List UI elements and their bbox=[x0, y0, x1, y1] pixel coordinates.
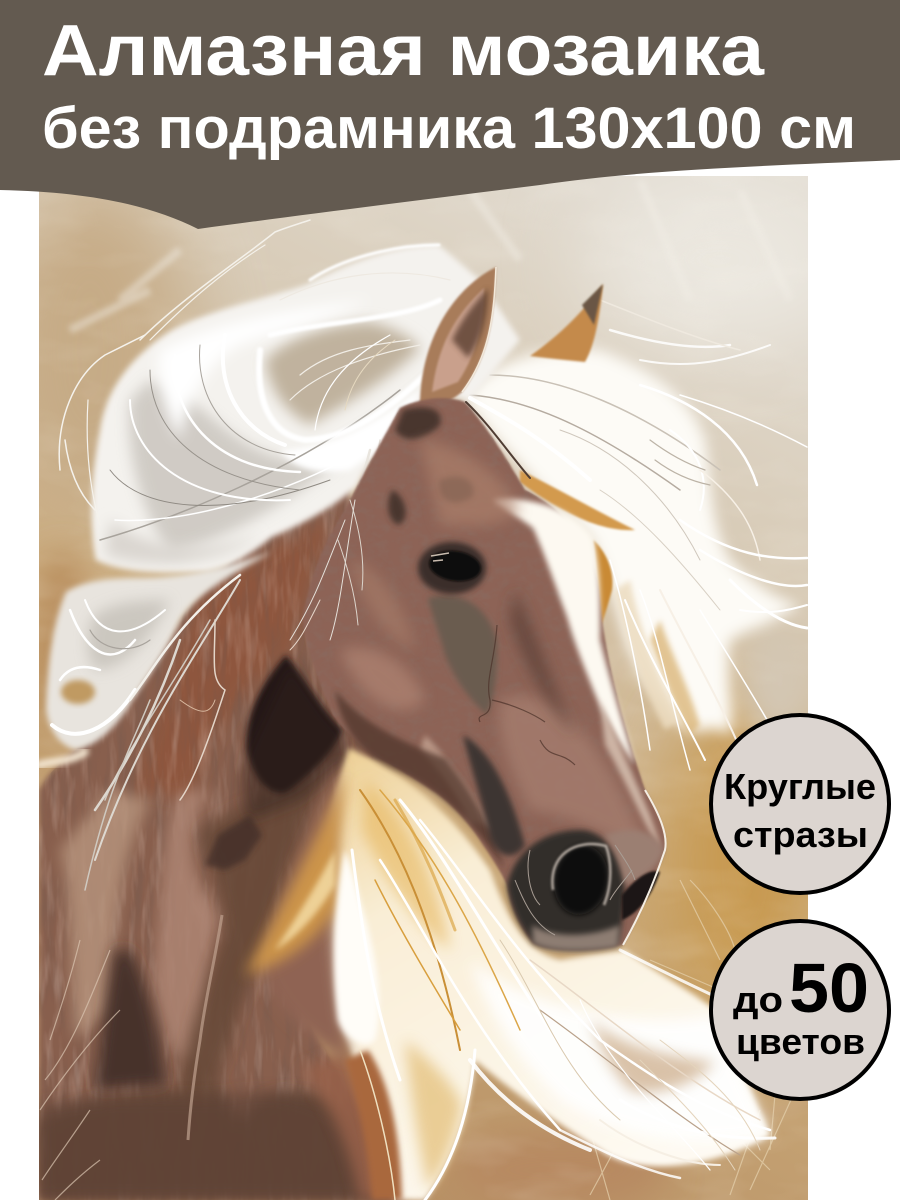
dark neck patch bbox=[247, 655, 342, 793]
lower golden mane bbox=[245, 748, 775, 1200]
gold right of feather bbox=[362, 780, 450, 950]
badge: up to 50 colours bbox=[711, 921, 889, 1099]
eye highlight bbox=[431, 553, 449, 561]
head white blaze bbox=[493, 499, 635, 765]
horse neck and body bbox=[39, 480, 420, 1200]
nostril rim bbox=[552, 844, 610, 905]
nose bridge shadow bbox=[510, 590, 575, 735]
muzzle lower lip bbox=[532, 925, 620, 951]
muzzle right pink bbox=[605, 830, 664, 885]
orange feather bbox=[245, 775, 348, 975]
brown left of feather bbox=[262, 760, 350, 1060]
title: без подрамника 130х100 см bbox=[42, 96, 856, 161]
painting background bbox=[39, 176, 808, 1200]
gold hole in the curl bbox=[61, 680, 95, 704]
reddish patch bottom bbox=[345, 1050, 402, 1200]
muzzle edge highlight bbox=[623, 790, 666, 945]
orange streak under forelock bbox=[520, 470, 635, 530]
cheek grey patch bbox=[428, 595, 497, 715]
title: Алмазная мозаика bbox=[42, 11, 765, 91]
gold gaps between right strands bbox=[650, 620, 700, 735]
badge: up to 50 colours: до bbox=[733, 979, 783, 1020]
reddish hip edge bbox=[306, 1051, 374, 1200]
forelock strands over the brow bbox=[290, 398, 590, 650]
eye bbox=[427, 548, 483, 584]
left upper mane bbox=[59, 220, 520, 572]
banner bbox=[0, 0, 900, 229]
body fur dark texture bbox=[39, 578, 306, 1083]
body fur light texture bbox=[39, 500, 348, 1200]
white inner feather bbox=[334, 850, 379, 1044]
muzzle whiskers bbox=[515, 845, 635, 935]
ear: right bbox=[530, 284, 603, 362]
badge: up to 50 colours: 50 bbox=[789, 949, 869, 1027]
nostril bbox=[548, 841, 614, 919]
white lobe lower bbox=[470, 960, 770, 1142]
head lighter muzzle tones bbox=[498, 694, 640, 834]
title bbox=[42, 11, 856, 161]
left lower mane lock bbox=[39, 552, 272, 890]
horse head bbox=[303, 398, 666, 951]
eye socket bbox=[418, 542, 486, 594]
ear: left bbox=[420, 267, 496, 406]
dark chest shadow bbox=[39, 770, 400, 1200]
upper face highlight bbox=[420, 440, 520, 526]
head fur texture bbox=[360, 404, 644, 790]
bottom fur tone bbox=[39, 1091, 400, 1200]
gold lock beside blaze bbox=[593, 540, 613, 630]
painting: horse with white mane bbox=[39, 176, 808, 1200]
dark stripe to muzzle bbox=[463, 735, 525, 855]
grey strand shading bbox=[129, 380, 340, 555]
gold lock bottom bbox=[405, 1040, 462, 1190]
badge: round rhinestones: стразы bbox=[733, 814, 868, 855]
badge: round rhinestones: Круглые bbox=[724, 766, 876, 807]
neck red-brown upper bbox=[135, 520, 330, 800]
jaw shading bbox=[335, 690, 505, 870]
tan gap in lower mane bbox=[590, 1020, 715, 1092]
mouth dark bbox=[622, 871, 660, 920]
facial vein lines bbox=[479, 625, 575, 765]
right mane bbox=[465, 300, 807, 770]
light pink band on shoulder bbox=[60, 790, 150, 1040]
badge: up to 50 colours: цветов bbox=[736, 1021, 865, 1062]
centre chest line bbox=[188, 915, 222, 1140]
dark vertical shoulder bbox=[95, 950, 165, 1090]
forehead shading bbox=[388, 407, 473, 525]
badge: round rhinestones bbox=[711, 715, 889, 893]
muzzle dark bbox=[507, 830, 625, 950]
hollow of the mane bbox=[265, 322, 420, 425]
